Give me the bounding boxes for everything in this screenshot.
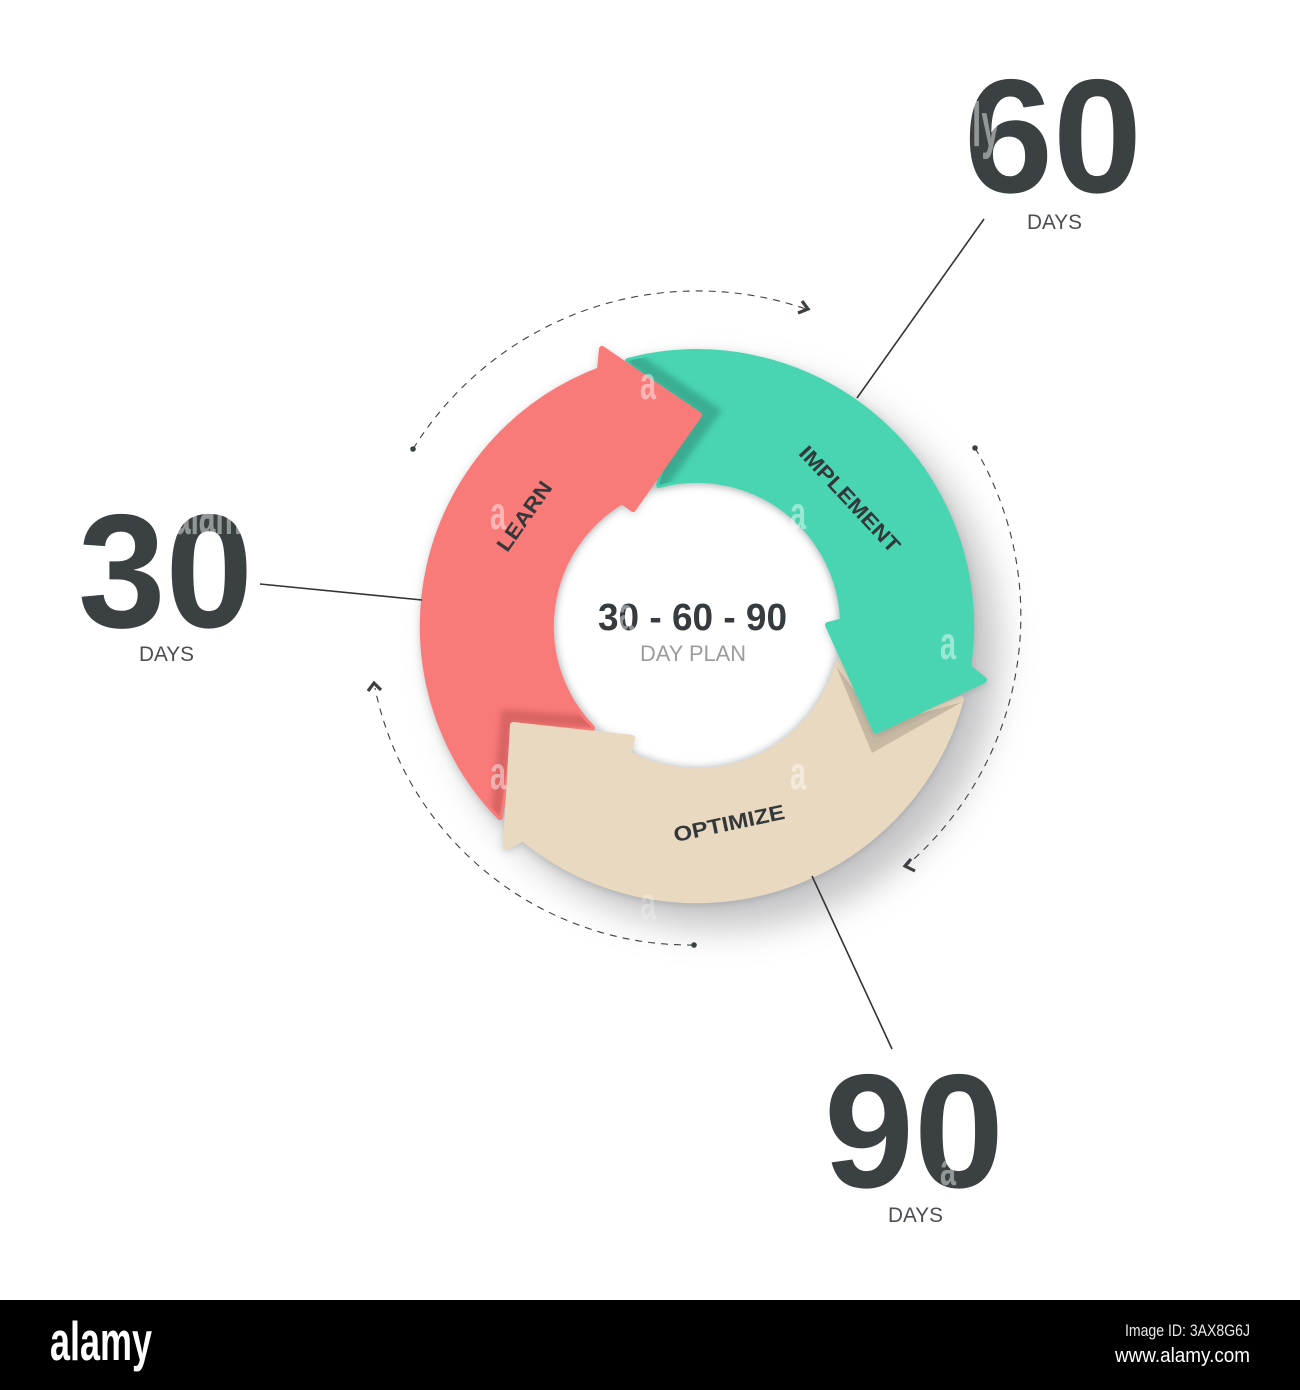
- center subtitle: DAY PLAN: [640, 641, 746, 666]
- number: 60 days: DAYS: [1027, 211, 1082, 234]
- watermark marks: a: [490, 487, 506, 539]
- label: learn: LEARN: [492, 477, 557, 556]
- watermark marks: a: [618, 588, 634, 640]
- shadow of red head on green: [630, 356, 712, 492]
- footer bar: [0, 1300, 1300, 1390]
- watermark marks: a: [490, 747, 506, 799]
- arrow: optimize beige head overlapping red: [503, 722, 685, 900]
- connector: 90 days: [812, 876, 892, 1049]
- number: 90 days: 90: [824, 1041, 1004, 1222]
- arrow: learn red segment: [423, 349, 699, 817]
- footer bar: Image ID: 3AX8G6J: [1125, 1321, 1250, 1340]
- watermark marks: a: [640, 877, 656, 929]
- watermark marks: a: [640, 357, 656, 409]
- watermark marks: a: [790, 747, 806, 799]
- arrow: implement green segment: [628, 352, 984, 731]
- label: implement: IMPLEMENT: [794, 442, 905, 558]
- number: 60 days: 60: [964, 46, 1142, 227]
- dashed cycle arrow: bottom left: [368, 683, 697, 948]
- connector: 60 days: [857, 219, 984, 398]
- watermark marks: alam: [174, 479, 242, 548]
- shadow of green head on beige: [836, 666, 962, 753]
- connector: 30 days: [260, 584, 422, 600]
- ring soft shadow: [441, 371, 999, 929]
- dashed cycle arrow: top: [410, 291, 808, 452]
- watermark marks: [174, 91, 1000, 1195]
- watermark marks: a: [940, 1143, 956, 1195]
- number: 30 days: 30: [78, 481, 253, 662]
- watermark marks: a: [940, 617, 956, 669]
- footer bar: www.alamy.com: [1114, 1345, 1250, 1367]
- shadow of beige head on red: [497, 716, 596, 815]
- number: 30 days: DAYS: [139, 643, 194, 666]
- arrow: optimize beige segment: [506, 663, 961, 900]
- label: optimize: OPTIMIZE: [672, 801, 787, 847]
- footer bar: alamy: [50, 1310, 152, 1372]
- watermark marks: ly: [972, 91, 1000, 160]
- dashed cycle arrow: right: [905, 445, 1021, 871]
- center title: 30 - 60 - 90: [598, 597, 787, 639]
- number: 90 days: DAYS: [888, 1204, 943, 1227]
- watermark marks: a: [790, 487, 806, 539]
